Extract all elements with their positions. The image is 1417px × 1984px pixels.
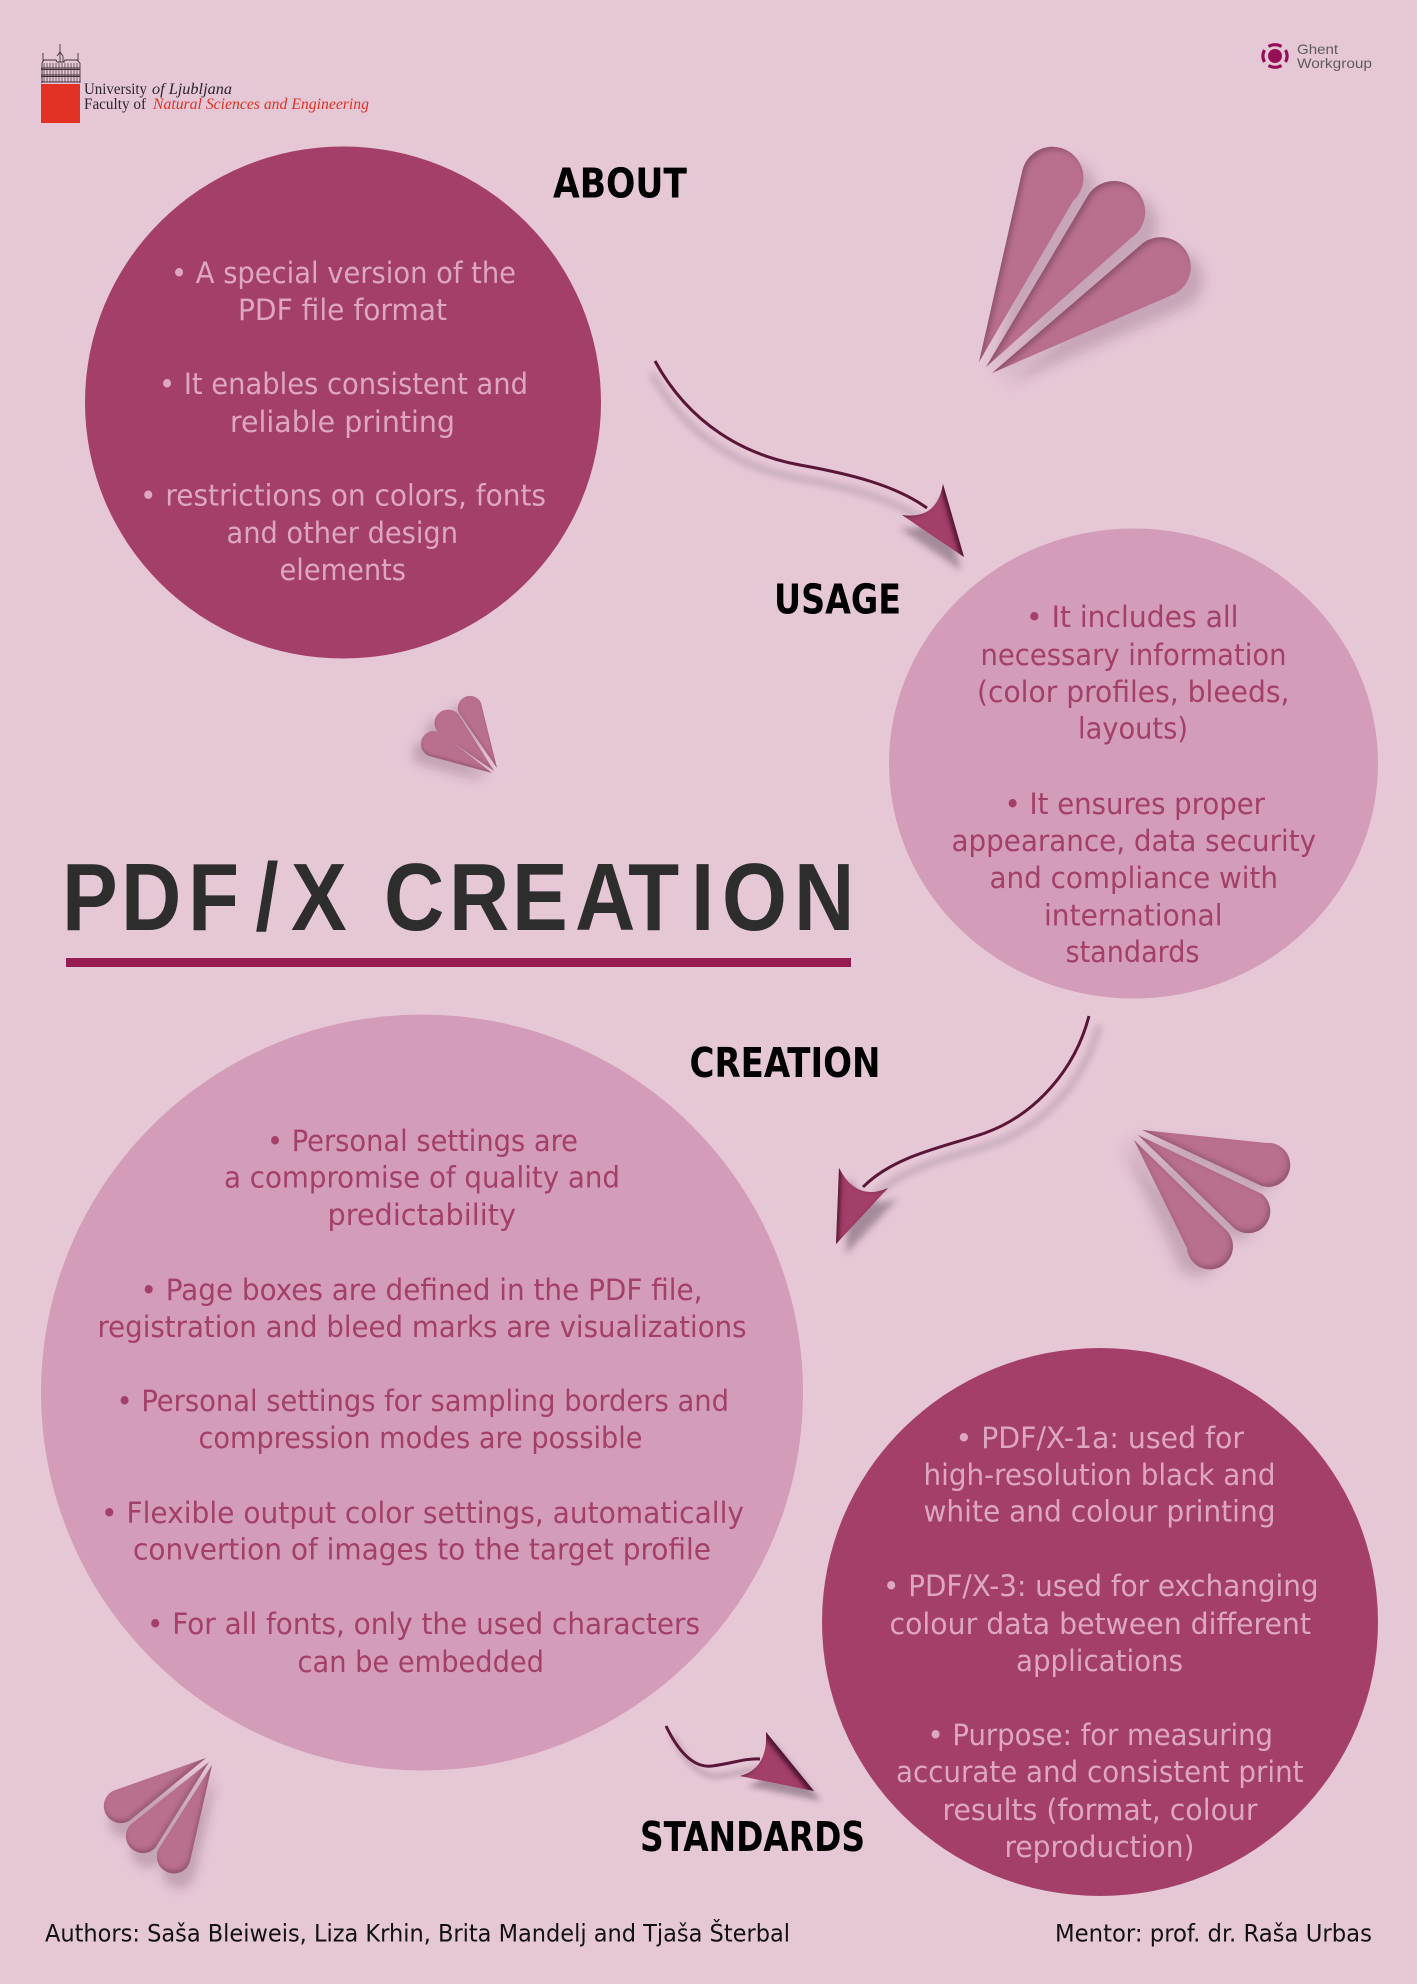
heading: creation: CREATION	[690, 1039, 880, 1087]
panel: standards	[822, 1348, 1378, 1896]
icon: flower bottom left	[104, 1758, 212, 1873]
icon: university building	[41, 44, 80, 83]
usage bullet text: appearance, data security	[952, 824, 1316, 858]
about bullet text: and other design	[226, 516, 458, 550]
title underline	[66, 958, 851, 967]
standards bullet text	[883, 1421, 1318, 1864]
panel: about	[85, 146, 601, 658]
heading: standards: STANDARDS	[640, 1813, 865, 1861]
Ghent Workgroup text: Ghent	[1297, 41, 1338, 57]
authors credit: Authors: Saša Bleiweis, Liza Krhin, Brita Mandelj and Tjaša Šterbal	[45, 1918, 790, 1948]
creation bullet text: • Personal settings are	[267, 1124, 578, 1158]
usage bullet text: and compliance with	[990, 861, 1278, 895]
creation bullet text: a compromise of quality and	[224, 1160, 620, 1194]
usage bullet text	[952, 600, 1316, 969]
creation bullet text	[98, 1124, 746, 1679]
standards bullet text: • PDF/X-3: used for exchanging	[883, 1569, 1318, 1603]
usage bullet text: necessary information	[980, 638, 1286, 672]
mentor credit: Mentor: prof. dr. Raša Urbas	[1055, 1920, 1372, 1948]
usage bullet text: international	[1044, 898, 1222, 932]
about circle	[85, 146, 601, 658]
heading: usage: USAGE	[774, 576, 901, 624]
arrow: usage to creation	[836, 1016, 1089, 1244]
creation bullet text: • Personal settings for sampling borders and	[116, 1384, 729, 1418]
icon: flower right	[1134, 1130, 1290, 1269]
about bullet text: reliable printing	[230, 405, 455, 439]
arrow: creation to standards	[666, 1726, 814, 1791]
faculty text: Faculty of	[84, 96, 147, 113]
logo: Ghent Workgroup	[1263, 41, 1372, 71]
creation circle	[41, 1014, 803, 1770]
standards bullet text: • PDF/X-1a: used for	[956, 1421, 1244, 1455]
Ghent Workgroup text	[1297, 41, 1372, 71]
standards bullet text: accurate and consistent print	[896, 1755, 1304, 1789]
panel: usage	[889, 528, 1378, 998]
faculty name: Natural Sciences and Engineering	[152, 96, 369, 113]
Ghent Workgroup text: Workgroup	[1297, 55, 1372, 71]
standards bullet text: applications	[1016, 1644, 1183, 1678]
usage circle	[889, 528, 1378, 998]
icon: small flower	[421, 696, 497, 773]
standards bullet text: • Purpose: for measuring	[928, 1718, 1273, 1752]
standards bullet text: white and colour printing	[924, 1494, 1276, 1528]
university name text: University	[84, 81, 147, 98]
logo: University of Ljubljana	[41, 44, 369, 123]
standards circle	[822, 1348, 1378, 1896]
university name italic: of Ljubljana	[152, 81, 232, 98]
panel: creation	[41, 1014, 803, 1770]
title: PDF/X CREATION	[62, 845, 854, 951]
creation bullet text: convertion of images to the target profile	[133, 1532, 711, 1566]
arrow: about to usage	[655, 361, 964, 557]
standards bullet text: colour data between different	[890, 1607, 1311, 1641]
about bullet text: • A special version of the	[171, 256, 516, 290]
creation bullet text: can be embedded	[298, 1645, 544, 1679]
usage bullet text: standards	[1066, 935, 1200, 969]
about bullet text: • restrictions on colors, fonts	[140, 478, 546, 512]
standards bullet text: high-resolution black and	[924, 1458, 1276, 1492]
creation bullet text: • For all fonts, only the used characters	[147, 1607, 700, 1641]
creation bullet text: • Flexible output color settings, automatically	[101, 1496, 744, 1530]
creation bullet text: registration and bleed marks are visualizations	[98, 1310, 746, 1344]
standards bullet text: results (format, colour	[942, 1793, 1258, 1827]
about bullet text: elements	[280, 553, 406, 587]
about bullet text: PDF file format	[238, 293, 447, 327]
red square	[41, 84, 80, 123]
usage bullet text: (color profiles, bleeds,	[977, 675, 1290, 709]
about bullet text: • It enables consistent and	[159, 367, 528, 401]
about bullet text	[140, 256, 546, 587]
icon: Ghent ring	[1263, 45, 1287, 67]
usage bullet text: • It includes all	[1026, 600, 1238, 634]
heading: about: ABOUT	[553, 160, 687, 208]
creation bullet text: • Page boxes are defined in the PDF file,	[140, 1273, 702, 1307]
usage bullet text: • It ensures proper	[1004, 787, 1265, 821]
creation bullet text: predictability	[328, 1198, 516, 1232]
standards bullet text: reproduction)	[1004, 1830, 1194, 1864]
icon: large flower top right	[979, 147, 1191, 373]
creation bullet text: compression modes are possible	[198, 1421, 642, 1455]
usage bullet text: layouts)	[1078, 712, 1188, 746]
